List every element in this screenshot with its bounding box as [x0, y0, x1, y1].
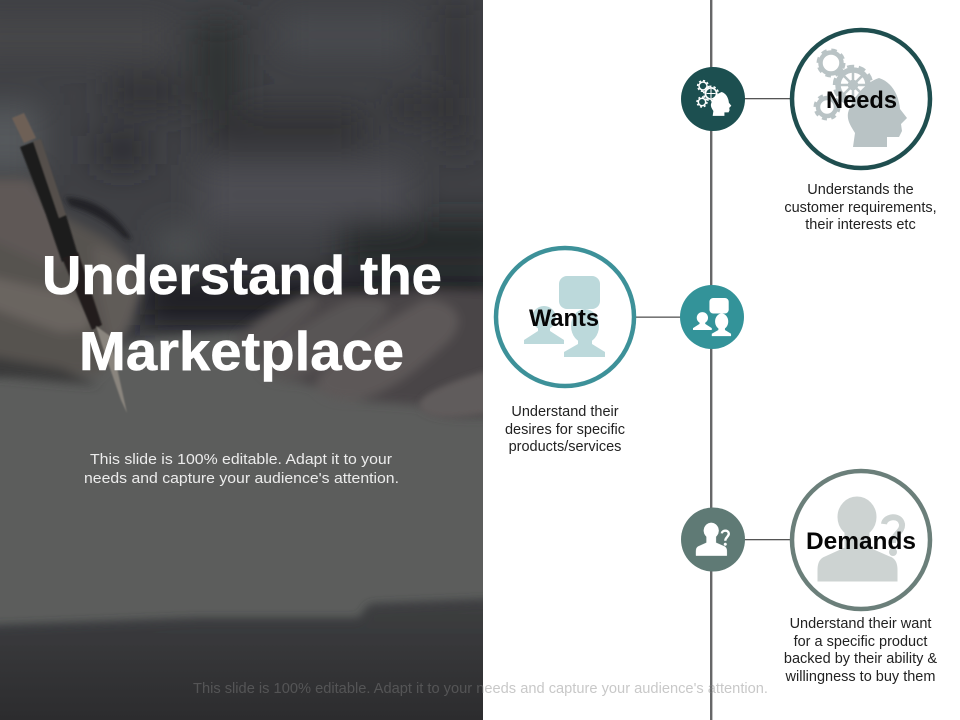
panel: needs [681, 30, 937, 233]
icon: pen [12, 113, 127, 413]
panel: demands [681, 471, 937, 685]
icon: demands small badge [681, 508, 745, 572]
hands [0, 178, 520, 417]
icon: needs small badge [681, 67, 745, 131]
text block: needs description: customer requirements, [784, 200, 937, 216]
arrow: wants connector [635, 316, 683, 318]
icon: wants small badge [680, 285, 744, 349]
text block: wants description: products/services [509, 439, 621, 455]
text block: needs description: their interests etc [805, 217, 916, 233]
text block: demands description: Understand their want [790, 616, 931, 632]
title [42, 244, 442, 382]
icon: wants large circle [496, 248, 634, 386]
arrow: demands connector [744, 539, 792, 540]
title: Marketplace [79, 320, 404, 382]
text block: wants description [505, 404, 625, 455]
panel: photo background [0, 0, 520, 720]
text block: intro [84, 451, 399, 487]
text block: demands description: backed by their ability & [784, 651, 937, 667]
heading: demands: Demands [806, 528, 916, 555]
text block: demands description [784, 616, 937, 685]
title: Understand the [42, 244, 442, 306]
text block: demands description: willingness to buy them [785, 669, 935, 685]
text block: footer note: This slide is 100% editable. Adapt it to your needs and capture your audience's attention. [193, 681, 768, 697]
icon: demands large circle [792, 471, 930, 609]
arrow: needs connector [744, 98, 792, 99]
text block: intro: needs and capture your audience's attention. [84, 470, 399, 487]
text block: wants description: desires for specific [505, 422, 625, 438]
text block: needs description [784, 182, 937, 233]
heading: needs: Needs [826, 87, 897, 114]
icon: needs large circle [792, 30, 930, 168]
panel: wants [496, 248, 744, 455]
text block: demands description: for a specific product [794, 634, 927, 650]
icon: vertical timeline [710, 0, 712, 720]
paper and desk [0, 332, 520, 628]
text block: intro: This slide is 100% editable. Adapt it to your [90, 451, 392, 468]
heading: wants: Wants [529, 305, 599, 332]
text block: needs description: Understands the [807, 182, 914, 198]
text block: wants description: Understand their [511, 404, 619, 420]
